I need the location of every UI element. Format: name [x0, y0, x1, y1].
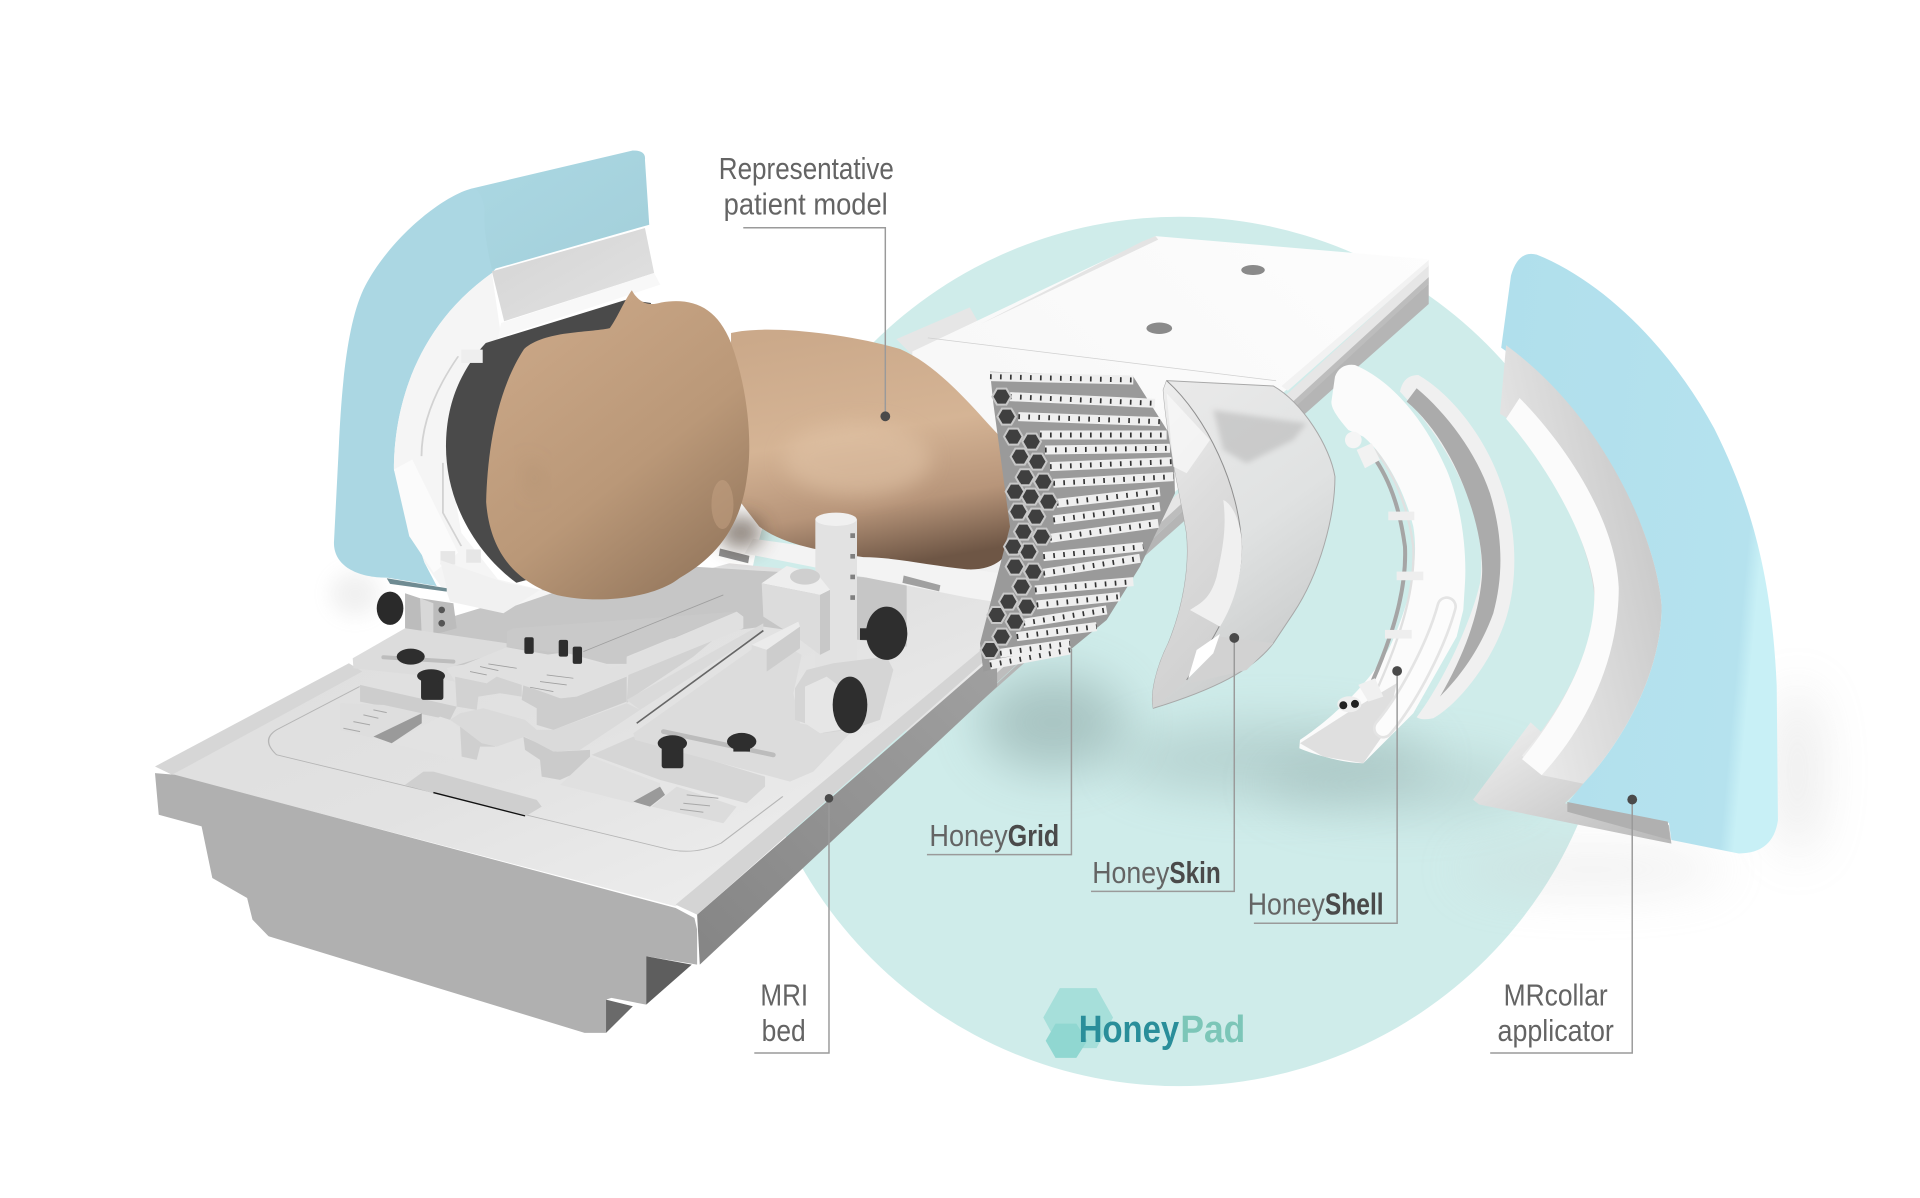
leader: HoneySkin: [1091, 633, 1239, 891]
white ring: [394, 273, 553, 609]
HoneySkin: [1152, 381, 1335, 708]
label: HoneySkin: Skin: [1169, 856, 1221, 890]
label: HoneyGrid: Honey: [929, 819, 1008, 853]
bed top surface: [172, 563, 997, 906]
shell lower plate shading: [1300, 683, 1397, 763]
leader: HoneyShell: [1254, 666, 1402, 923]
label: HoneySkin: Honey: [1092, 856, 1170, 890]
white pad and tubing: [394, 350, 483, 573]
column post: [815, 513, 857, 686]
lower slide plate: [450, 703, 640, 752]
representative patient model: torso: [719, 330, 1011, 569]
label: MRI bed: bed: [762, 1014, 806, 1048]
black knobs and pins: [397, 607, 907, 768]
leader: MRcollar applicator: [1490, 795, 1637, 1053]
label: HoneyShell: Shell: [1325, 888, 1384, 922]
skin left fold: [1152, 381, 1242, 708]
label: MRI bed: MRI: [760, 978, 808, 1012]
label: HoneyShell: [1248, 888, 1384, 922]
right MRcollar applicator: [1473, 254, 1778, 853]
label: MRcollar applicator: applicator: [1498, 1014, 1614, 1048]
collar blue shell: [1501, 254, 1778, 853]
left rear platform: [353, 628, 507, 720]
upper slide graduation marks: [470, 595, 723, 692]
leader: MRI bed: [754, 794, 833, 1053]
HoneyGrid: [980, 372, 1175, 672]
left MRcollar applicator: [334, 150, 660, 609]
left ruled plate: [340, 703, 462, 758]
positioning hardware on the bed: [340, 513, 907, 823]
lower slide legs: [460, 727, 590, 780]
grid backing: [980, 372, 1175, 672]
collar slot: [1567, 802, 1670, 840]
right lower block: [560, 737, 765, 823]
HoneyPad logo: Honey: [1079, 1009, 1179, 1051]
collar white strip: [1506, 398, 1619, 775]
label: MRcollar applicator: MRcollar: [1504, 978, 1608, 1012]
leader: HoneyGrid: [927, 649, 1071, 855]
upper slide legs: [455, 623, 763, 730]
right upper platform: [633, 637, 850, 782]
shell outer ring: [1400, 375, 1514, 719]
bed front face: [155, 773, 697, 1033]
rear bracket and knob: [377, 592, 457, 635]
blue shell: [334, 186, 529, 586]
blue top block: [474, 150, 649, 270]
label: HoneyGrid: Grid: [1008, 819, 1059, 853]
representative patient model: head: [486, 290, 749, 599]
bed surface under patient: [373, 539, 998, 667]
MRI bed: far end: [896, 236, 1429, 768]
shell inner plate: [1299, 365, 1465, 763]
bed rail strips: [155, 637, 997, 1033]
skin texture: [1213, 410, 1307, 463]
MRI bed: front section: [155, 563, 997, 1033]
collar base wedge: [387, 560, 540, 613]
cast shadows: [331, 572, 1820, 891]
HoneyShell: [1299, 365, 1514, 763]
bed side face: [697, 653, 997, 965]
label: HoneySkin: [1092, 856, 1221, 890]
upper slide grey plate: [507, 612, 737, 664]
bed inset outline: [269, 687, 783, 851]
column base and clamp: [795, 657, 893, 733]
grid strips: [990, 377, 1173, 665]
skin white crescent: [1190, 500, 1242, 627]
label: MRI bed: [760, 978, 808, 1048]
clamp block: [762, 566, 830, 655]
collar inner crescent: [1500, 345, 1662, 784]
upper slide rim and front plate: [447, 612, 743, 698]
label: Representative patient model: [719, 152, 894, 221]
grid hex cells: [981, 389, 1058, 658]
skin outer pouch: [1152, 381, 1335, 708]
shell tubing: [1368, 450, 1447, 728]
grey inner panel: [492, 228, 654, 321]
label: HoneyGrid: [929, 819, 1059, 853]
label: Representative patient model: patient model: [724, 187, 888, 221]
shell clips and ports: [1337, 432, 1423, 712]
label: HoneyShell: Honey: [1248, 888, 1325, 922]
leader: representative patient model: [743, 228, 890, 421]
handle notch: [405, 772, 542, 817]
skin bottom corner: [1190, 637, 1273, 683]
label: Representative patient model: Representative: [719, 152, 894, 186]
adjuster tab: [752, 622, 800, 672]
base plate: [1473, 722, 1671, 844]
label: MRcollar applicator: [1498, 978, 1614, 1048]
HoneyPad logo: Pad: [1180, 1009, 1245, 1051]
dark padding: [446, 300, 651, 583]
background circle: [744, 217, 1614, 1086]
HoneyPad logo: [1043, 988, 1245, 1058]
